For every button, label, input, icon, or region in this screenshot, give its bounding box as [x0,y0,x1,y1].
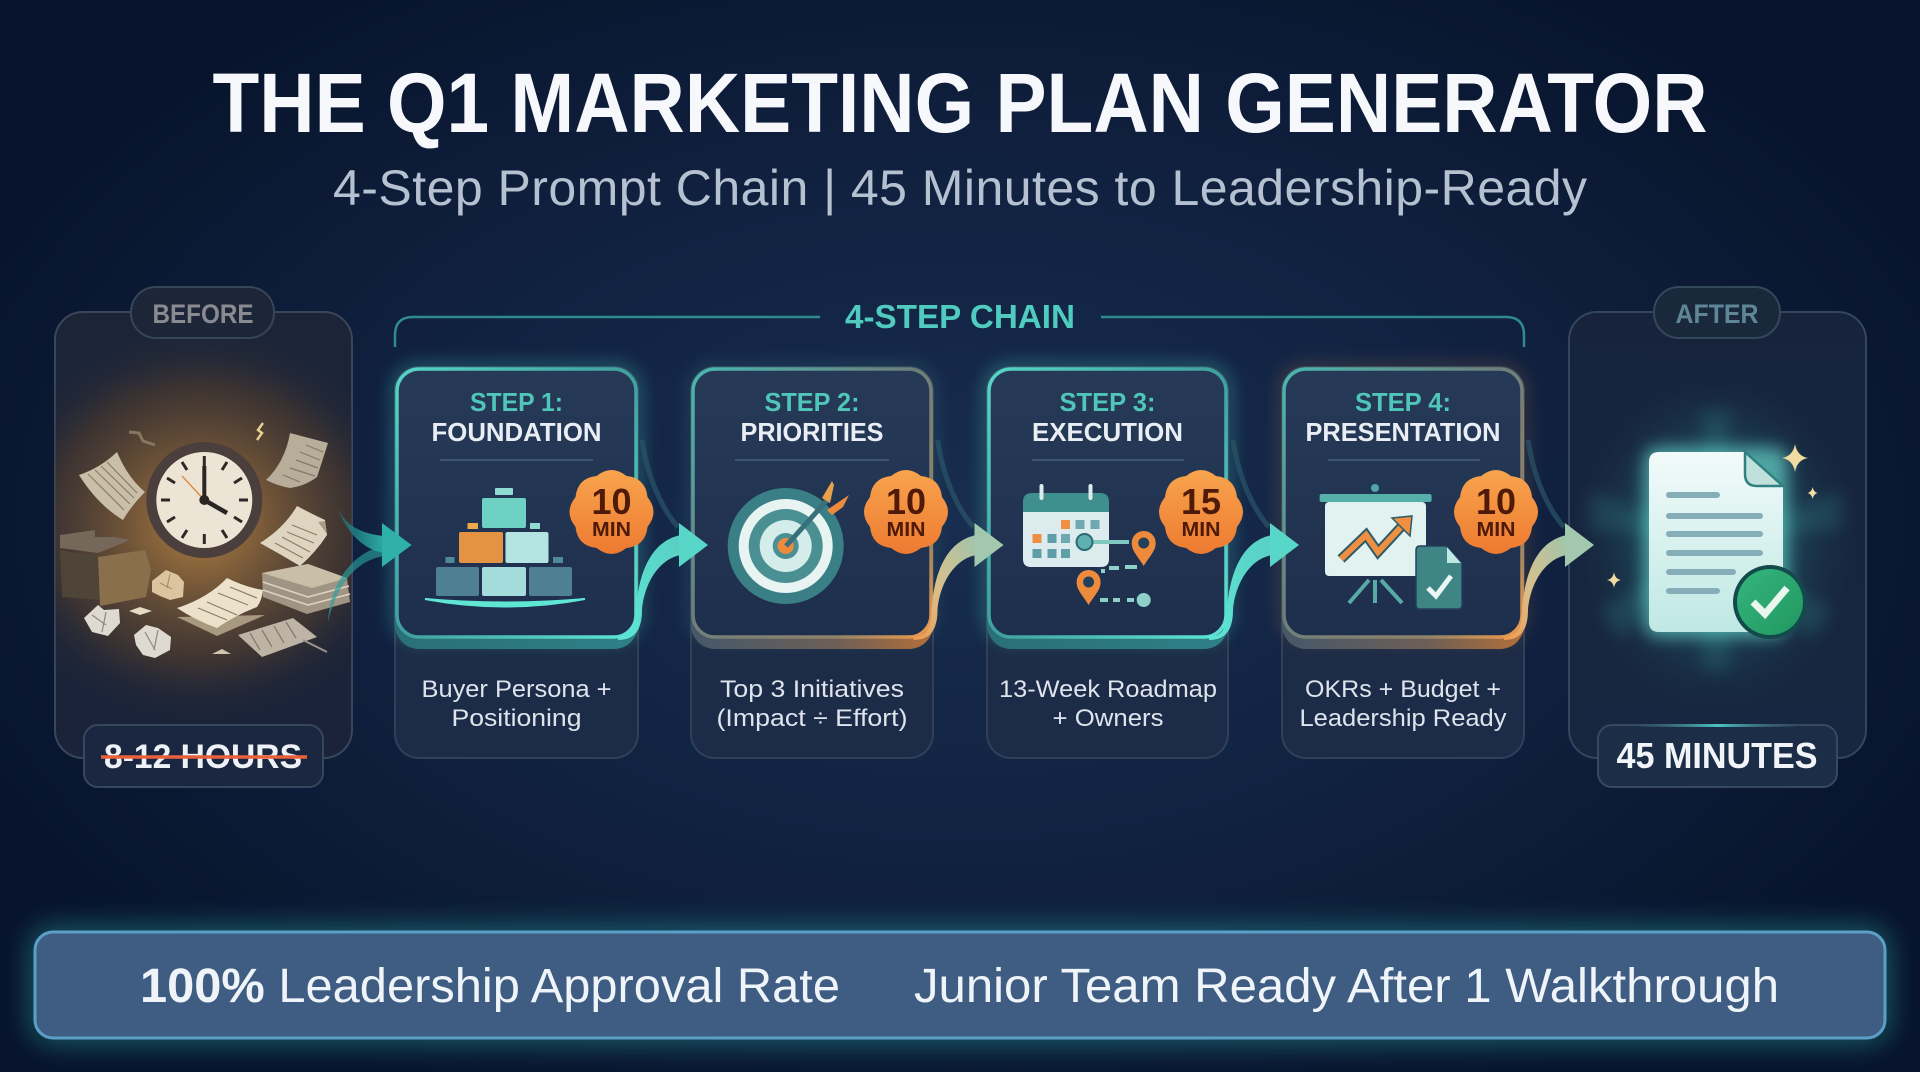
panel: after [1569,287,1866,787]
panel: step 3 execution: EXECUTION [1032,417,1183,447]
chain heading with bracket: 4-STEP CHAIN [845,298,1075,335]
time chip: 45 minutes [1598,724,1837,787]
step heading: STEP 1: [470,387,563,417]
panel: step 2 priorities: (Impact ÷ Effort) [716,705,908,732]
badge: after [1654,287,1780,338]
badge: step 4 time [1454,470,1538,554]
icon: calendar roadmap [1023,484,1156,607]
banner: results [30,926,1890,1044]
badge: after: AFTER [1676,299,1758,329]
badge: step 2 time [864,470,948,554]
step heading: STEP 4: [1355,387,1451,417]
badge: step 1 time: MIN [592,519,631,541]
badge: step 3 time [1159,470,1243,554]
badge: step 4 time: 10 [1476,481,1516,522]
panel: before [54,286,353,788]
description: OKRs + Budget + [1305,676,1501,703]
badge: before: BEFORE [152,299,254,329]
step heading: STEP 3: [1060,387,1156,417]
badge: before [131,287,274,338]
panel: step 4 presentation [1282,367,1524,758]
panel: step 1 foundation [395,367,638,758]
icon: block pyramid [425,488,585,606]
badge: step 2 time: 10 [886,481,926,522]
arrow: step 1 to step 2 [618,440,708,640]
panel: step 3 execution: + Owners [1052,705,1164,732]
panel: step 2 priorities: PRIORITIES [740,417,884,447]
description: 13-Week Roadmap [999,676,1217,703]
panel: step 4 presentation: PRESENTATION [1306,417,1500,447]
badge: step 1 time: 10 [591,481,632,522]
panel: step 1 foundation: FOUNDATION [432,417,602,447]
description: Top 3 Initiatives [720,676,904,703]
badge: step 4 time: MIN [1476,519,1516,541]
panel: step 4 presentation: Leadership Ready [1300,705,1506,732]
arrow: step 4 to after [1504,440,1594,640]
panel: step 2 priorities [691,367,933,758]
description: Buyer Persona + [422,676,612,703]
time chip: 45 minutes: 45 MINUTES [1616,735,1818,776]
badge: step 2 time: MIN [886,519,926,541]
stat: leadership approval: 100% Leadership Approval Rate [140,960,840,1013]
icon: presentation board [1320,484,1462,609]
icon: wall clock [146,442,262,558]
stat: junior team: Junior Team Ready After 1 Walkthrough [914,960,1779,1013]
panel: step 1 foundation: Positioning [452,705,582,732]
crumpled paper balls [84,570,184,658]
step heading: STEP 2: [764,387,860,417]
title: THE Q1 MARKETING PLAN GENERATOR [212,56,1708,150]
chain heading with bracket [395,298,1524,347]
arrow: step 3 to step 4 [1209,440,1299,640]
time chip: 8-12 hours struck through: 8-12 HOURS [104,738,302,776]
badge: step 3 time: 15 [1181,481,1221,522]
badge: step 1 time [570,470,654,554]
time chip: 8-12 hours struck through [84,725,323,787]
icon: approved document with glow [1586,400,1846,679]
illustration: chaos around a clock [55,356,352,696]
subtitle: 4-Step Prompt Chain | 45 Minutes to Leadership-Ready [333,160,1587,216]
panel: step 3 execution [987,367,1228,758]
arrow: step 2 to step 3 [914,440,1004,640]
badge: step 3 time: MIN [1182,519,1220,541]
icon: target with arrow [728,481,849,604]
arrow: before to step 1 [328,492,412,622]
